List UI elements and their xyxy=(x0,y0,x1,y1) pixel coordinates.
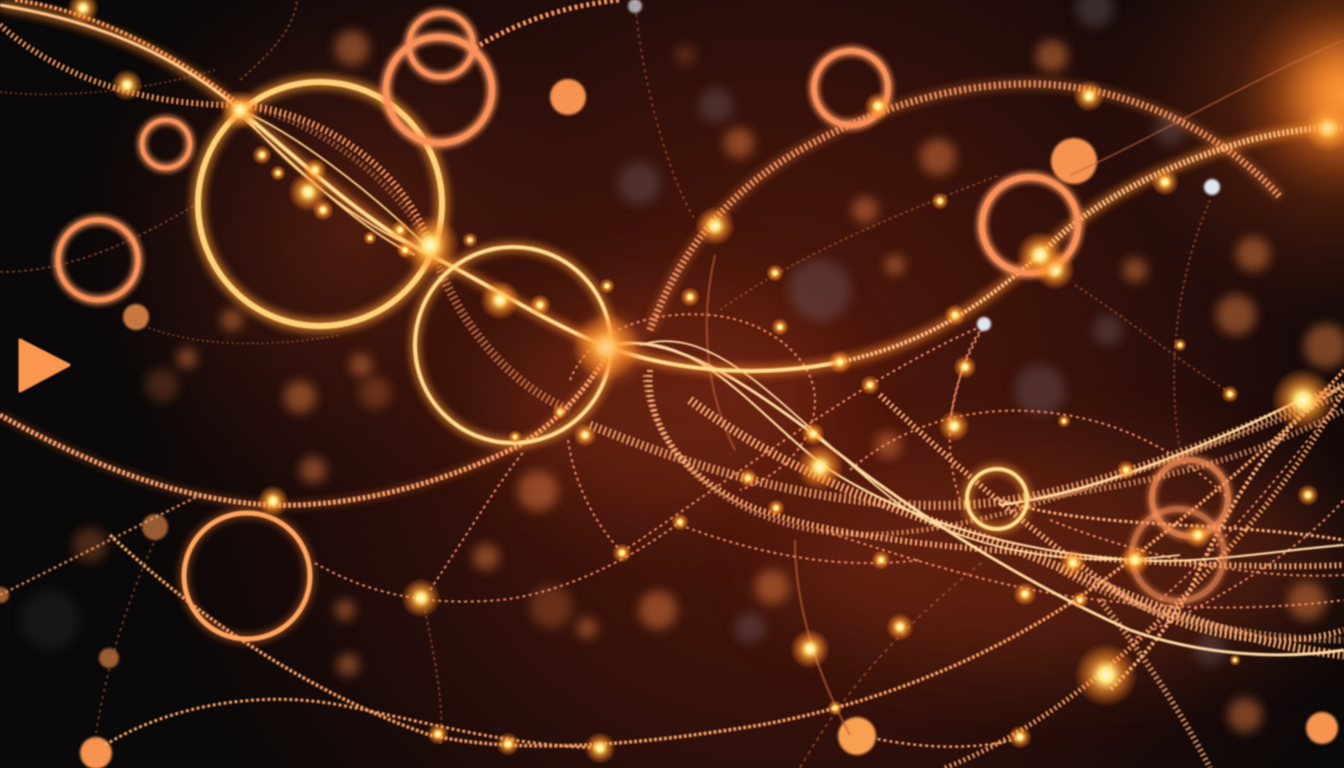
main dotted arc, upper right xyxy=(650,84,1280,330)
ring: central xyxy=(415,247,611,443)
central woven band, lower right xyxy=(590,370,1344,768)
central glow haze xyxy=(580,318,640,378)
ring: lower-left xyxy=(184,513,310,639)
top-right sun flare xyxy=(1299,50,1344,140)
small rings xyxy=(58,13,1228,601)
triangle play marker xyxy=(20,340,69,391)
lower-left sweep curve xyxy=(0,350,610,505)
main bright strand, hub to hub xyxy=(0,5,1344,371)
upper-left dotted swirls xyxy=(0,0,620,410)
bright crossing strands xyxy=(610,341,1344,655)
bottom long curve xyxy=(0,370,1344,768)
ring: large upper-left xyxy=(198,82,442,326)
dotted connector curves xyxy=(315,314,1344,640)
ring: bright lower right xyxy=(967,469,1027,529)
